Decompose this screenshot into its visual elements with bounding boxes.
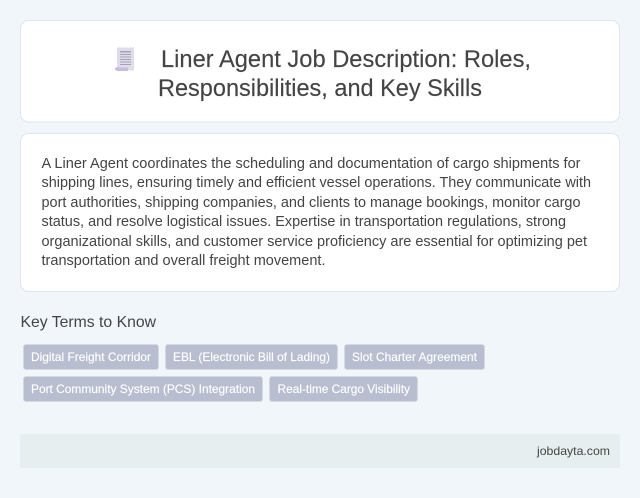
text block: description: transportation and overall freight movement. xyxy=(42,253,326,269)
heading: title: Liner Agent Job Description: Roles, xyxy=(161,46,531,73)
tag: ebl xyxy=(166,344,338,370)
tag: ebl: EBL (Electronic Bill of Lading) xyxy=(173,350,330,364)
text block: description xyxy=(42,156,591,269)
heading: title: Responsibilities, and Key Skills xyxy=(158,75,482,102)
text block: description: A Liner Agent coordinates the scheduling and documentation of cargo shipments for xyxy=(42,156,581,172)
tag: real-time cargo visibility xyxy=(270,376,418,402)
tag: digital freight corridor xyxy=(24,344,158,370)
footer text: site name: jobdayta.com xyxy=(536,444,610,458)
heading: title xyxy=(158,46,531,102)
tag: real-time cargo visibility: Real-time Cargo Visibility xyxy=(278,382,410,396)
tag: port community system xyxy=(24,376,262,402)
footer xyxy=(20,434,620,468)
tags: key terms list xyxy=(24,344,484,402)
text block: description: organizational skills, and customer service proficiency are essential for optimizing pet xyxy=(42,234,587,250)
text block: description: port authorities, shipping companies, and clients to manage bookings, monitor cargo xyxy=(42,195,580,211)
tag: slot charter agreement: Slot Charter Agreement xyxy=(352,350,478,364)
panel: description card xyxy=(20,134,620,292)
heading: key terms: Key Terms to Know xyxy=(20,314,156,331)
tag: slot charter agreement xyxy=(344,344,484,370)
text block: description: status, and resolve logistical issues. Expertise in transportation regulations, strong xyxy=(42,214,566,230)
panel: title card xyxy=(20,20,620,122)
tag: port community system: Port Community System (PCS) Integration xyxy=(31,382,255,396)
tag: digital freight corridor: Digital Freight Corridor xyxy=(31,350,151,364)
text block: description: shipping lines, ensuring timely and efficient vessel operations. They communicate with xyxy=(42,175,591,191)
icon: document receipt xyxy=(115,47,134,71)
